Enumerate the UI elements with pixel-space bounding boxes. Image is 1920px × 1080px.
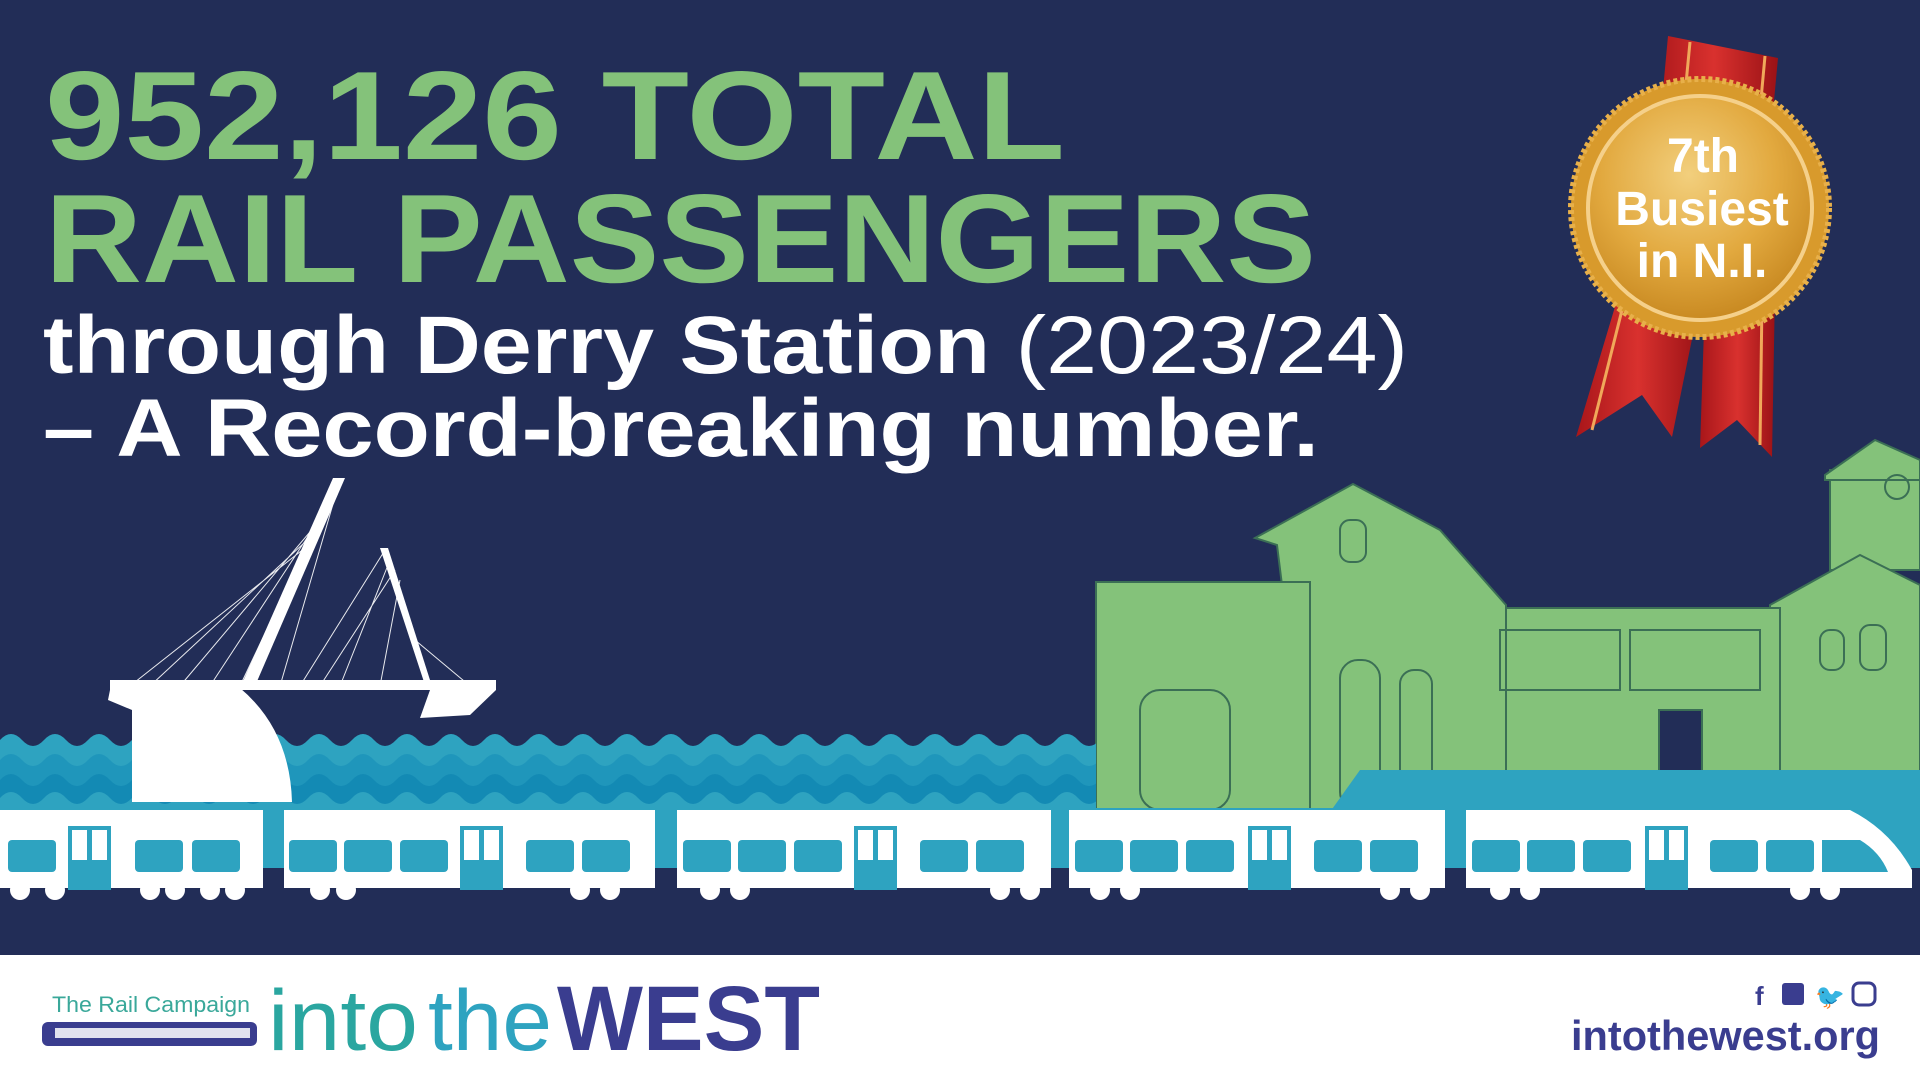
train [0, 808, 1920, 900]
platform [1330, 770, 1920, 812]
footer bar [0, 955, 1920, 1080]
footer social icons and url [1571, 981, 1880, 1059]
title: headline number: RAIL PASSENGERS [45, 168, 1316, 309]
footer logo: into the WEST [42, 968, 820, 1070]
footer social icons and url: 🐦 [1815, 984, 1845, 1011]
subtitle text: – A Record-breaking number. [43, 383, 1319, 474]
water waves [0, 728, 1096, 812]
medal: 7th busiest [1571, 36, 1829, 457]
buildings: Derry station [1096, 440, 1920, 810]
subtitle text: through Derry Station (2023/24) [43, 300, 1408, 391]
title: headline number [45, 45, 1316, 309]
medal: 7th busiest: Busiest [1615, 183, 1789, 236]
title: headline number: 952,126 TOTAL [45, 45, 1065, 186]
footer logo: into the WEST: WEST [557, 968, 820, 1070]
footer social icons and url: intothewest.org [1571, 1012, 1880, 1059]
footer logo: into the WEST: the [428, 973, 552, 1069]
bridge: Peace Bridge [108, 478, 496, 802]
medal: 7th busiest: 7th [1667, 130, 1739, 183]
subtitle text [43, 300, 1408, 474]
footer logo: into the WEST: into [268, 973, 418, 1069]
medal: 7th busiest: in N.I. [1637, 235, 1767, 288]
footer social icons and url: f [1755, 981, 1764, 1011]
footer logo: into the WEST: The Rail Campaign [52, 992, 250, 1017]
